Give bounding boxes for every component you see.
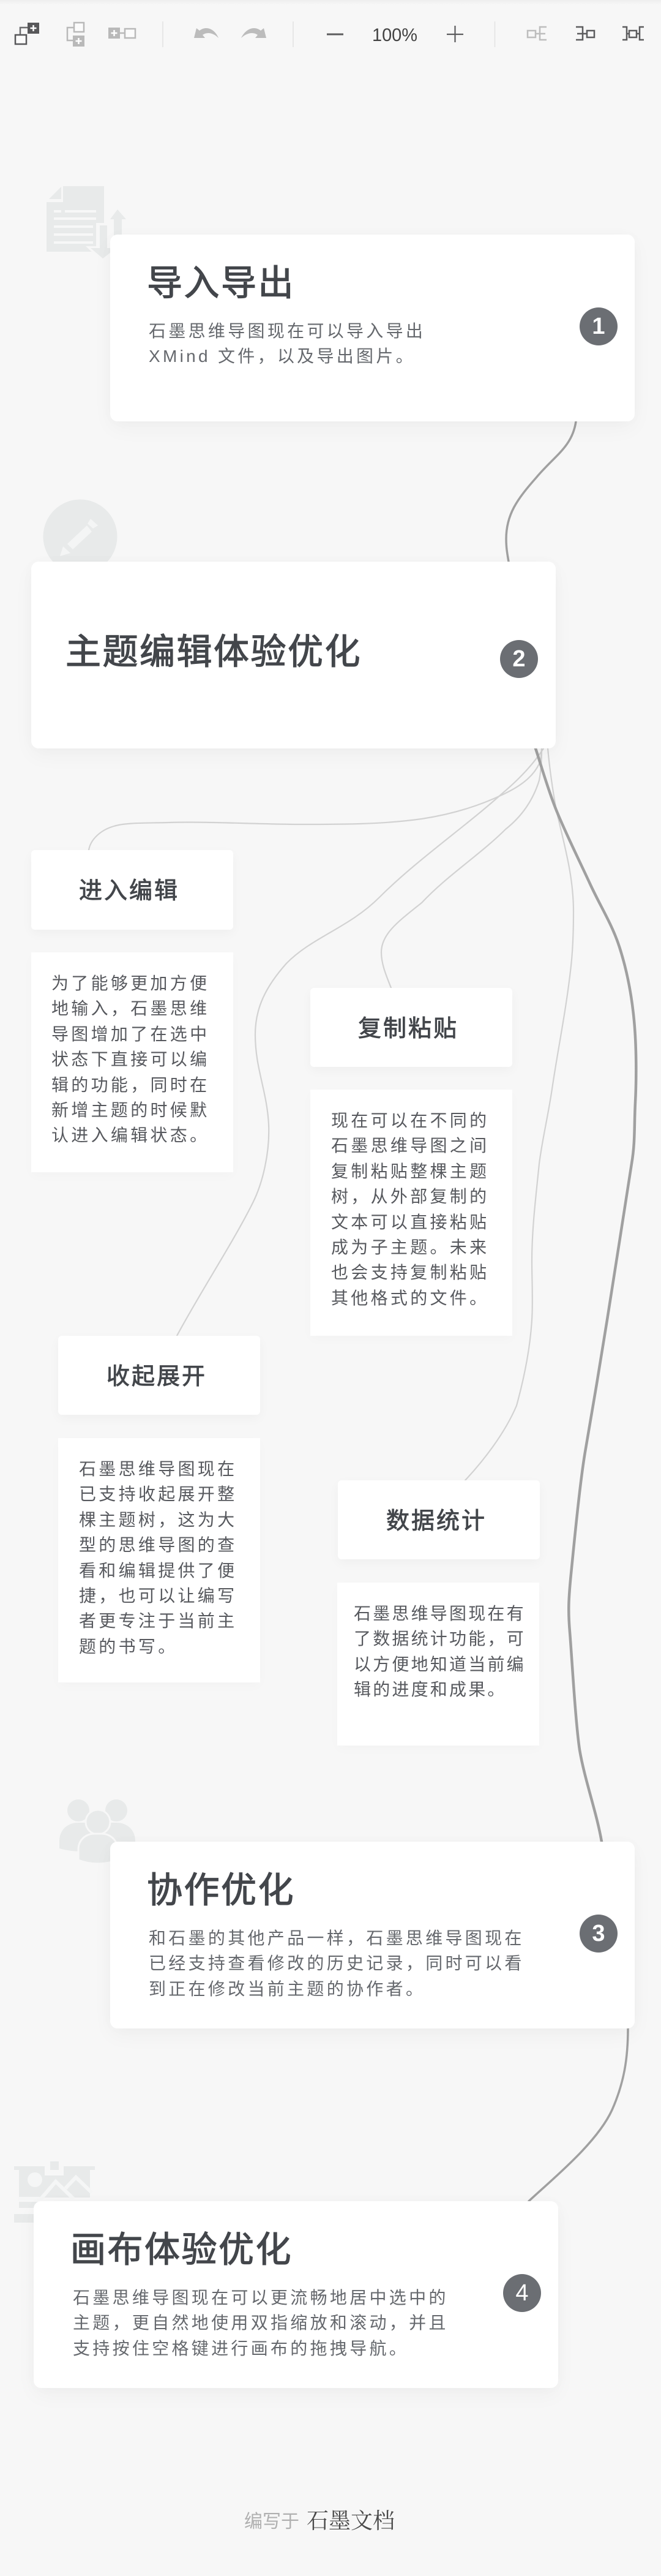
text: collapse expand description: 石墨思维导图现在 <box>79 1459 237 1478</box>
text: collapse expand description: 题的书写。 <box>79 1637 178 1656</box>
icon: redo <box>241 28 266 38</box>
text: enter edit description: 认进入编辑状态。 <box>51 1126 209 1145</box>
icon: add sibling topic <box>108 28 135 39</box>
panel: enter edit title <box>31 850 233 930</box>
main connector: topic 3 to 4 <box>529 2028 628 2201</box>
text: statistics description: 辑的进度和成果。 <box>354 1680 507 1699</box>
heading: topic editing: 主题编辑体验优化 <box>65 632 362 672</box>
text: copy paste description: 文本可以直接粘贴 <box>331 1213 489 1232</box>
heading: collaboration: 协作优化 <box>147 1870 295 1910</box>
heading: statistics: 数据统计 <box>386 1508 487 1534</box>
text: enter edit description: 导图增加了在选中 <box>51 1025 209 1044</box>
text: copy paste description: 树，从外部复制的 <box>331 1187 489 1206</box>
text: statistics description: 了数据统计功能，可 <box>354 1629 526 1648</box>
toolbar <box>15 21 644 47</box>
icon: zoom out <box>327 33 343 36</box>
thin connector: collapse expand <box>177 748 543 1336</box>
icon: canvas picture <box>14 2161 95 2223</box>
panel: copy paste description <box>310 1090 512 1336</box>
text: import export description: XMind 文件，以及导出图片。 <box>149 347 416 366</box>
text: copy paste description: 石墨思维导图之间 <box>331 1136 489 1155</box>
panel: topic editing <box>31 562 556 748</box>
panel: copy paste title <box>310 988 512 1067</box>
badge 4: 4 <box>515 2280 529 2306</box>
text: copy paste description: 其他格式的文件。 <box>331 1289 489 1308</box>
main connector: topic 2 to 3 <box>536 748 636 1842</box>
heading: import export: 导入导出 <box>147 263 295 303</box>
heading: copy paste: 复制粘贴 <box>358 1016 458 1042</box>
text: collapse expand description: 棵主题树，这为大 <box>79 1510 237 1529</box>
icon: collaborators <box>59 1799 135 1863</box>
text: collapse expand description <box>79 1459 237 1656</box>
text: enter edit description: 新增主题的时候默 <box>51 1101 209 1120</box>
text: enter edit description: 为了能够更加方便 <box>51 974 209 993</box>
badge 3: 3 <box>592 1921 605 1946</box>
text: copy paste description: 现在可以在不同的 <box>331 1111 489 1130</box>
text: enter edit description <box>51 974 209 1145</box>
panel: enter edit description <box>31 952 233 1172</box>
heading: enter edit: 进入编辑 <box>79 878 179 904</box>
text: statistics description <box>354 1604 526 1699</box>
panel: statistics description <box>337 1583 539 1746</box>
badge 1 <box>580 307 618 345</box>
panel: canvas experience <box>34 2201 558 2388</box>
footer: written with: 编写于 <box>244 2512 299 2532</box>
text: collapse expand description: 者更专注于当前主 <box>79 1611 237 1630</box>
badge 3 <box>580 1915 618 1953</box>
text: copy paste description: 成为子主题。未来 <box>331 1238 489 1257</box>
panel: statistics title <box>338 1480 540 1559</box>
text: enter edit description: 地输入，石墨思维 <box>51 999 209 1018</box>
footer: brand name: 石墨文档 <box>307 2504 395 2535</box>
thin connector: copy paste <box>381 748 542 988</box>
badge 1: 1 <box>592 314 605 339</box>
text: statistics description: 以方便地知道当前编 <box>354 1655 526 1674</box>
main connector: topic 1 to 2 <box>506 421 576 562</box>
text: statistics description: 石墨思维导图现在有 <box>354 1604 526 1623</box>
panel: collapse expand title <box>58 1336 260 1415</box>
thin connector: statistics <box>465 748 573 1480</box>
text: copy paste description <box>331 1111 489 1308</box>
badge 4 <box>503 2274 541 2312</box>
badge 2: 2 <box>512 646 526 672</box>
heading: canvas experience: 画布体验优化 <box>70 2230 293 2270</box>
text: copy paste description: 也会支持复制粘贴 <box>331 1263 489 1282</box>
icon: add parent topic <box>15 23 39 44</box>
icon: zoom in <box>447 26 463 42</box>
text: collapse expand description: 捷，也可以让编写 <box>79 1586 237 1605</box>
text: canvas experience description: 支持按住空格键进行画布的拖拽导航。 <box>73 2339 409 2358</box>
text: import export description <box>149 322 425 366</box>
thin connector: enter edit <box>89 748 542 850</box>
icon: layout right <box>528 27 547 40</box>
text: enter edit description: 状态下直接可以编 <box>51 1050 209 1069</box>
icon: add child topic <box>67 23 84 47</box>
text: canvas experience description: 主题，更自然地使用双指缩放和滚动，并且 <box>73 2313 449 2332</box>
icon: pencil in circle <box>43 500 118 562</box>
panel: collaboration <box>110 1842 635 2028</box>
text: collaboration description: 已经支持查看修改的历史记录，同时可以看 <box>149 1954 525 1973</box>
text: collapse expand description: 型的思维导图的查 <box>79 1535 237 1554</box>
badge 2 <box>500 640 538 678</box>
text: import export description: 石墨思维导图现在可以导入导出 <box>149 322 425 341</box>
text: canvas experience description: 石墨思维导图现在可以更流畅地居中选中的 <box>73 2288 449 2307</box>
footer <box>244 2504 395 2535</box>
text: copy paste description: 复制粘贴整棵主题 <box>331 1162 489 1181</box>
text: canvas experience description <box>73 2288 449 2358</box>
icon: layout both sides <box>622 27 644 40</box>
icon: undo <box>194 28 218 38</box>
text: collapse expand description: 看和编辑提供了便 <box>79 1561 237 1580</box>
panel: collapse expand description <box>58 1438 260 1682</box>
zoom level: 100% <box>372 25 417 45</box>
text: collapse expand description: 已支持收起展开整 <box>79 1485 237 1504</box>
text: enter edit description: 辑的功能，同时在 <box>51 1075 209 1094</box>
icon: layout left <box>576 27 594 40</box>
heading: collapse expand: 收起展开 <box>106 1364 207 1390</box>
text: collaboration description: 和石墨的其他产品一样，石墨思维导图现在 <box>149 1929 525 1948</box>
text: collaboration description <box>149 1929 525 1998</box>
text: collaboration description: 到正在修改当前主题的协作者。 <box>149 1979 425 1998</box>
panel: import export <box>110 235 635 421</box>
icon: document import export <box>47 186 126 258</box>
